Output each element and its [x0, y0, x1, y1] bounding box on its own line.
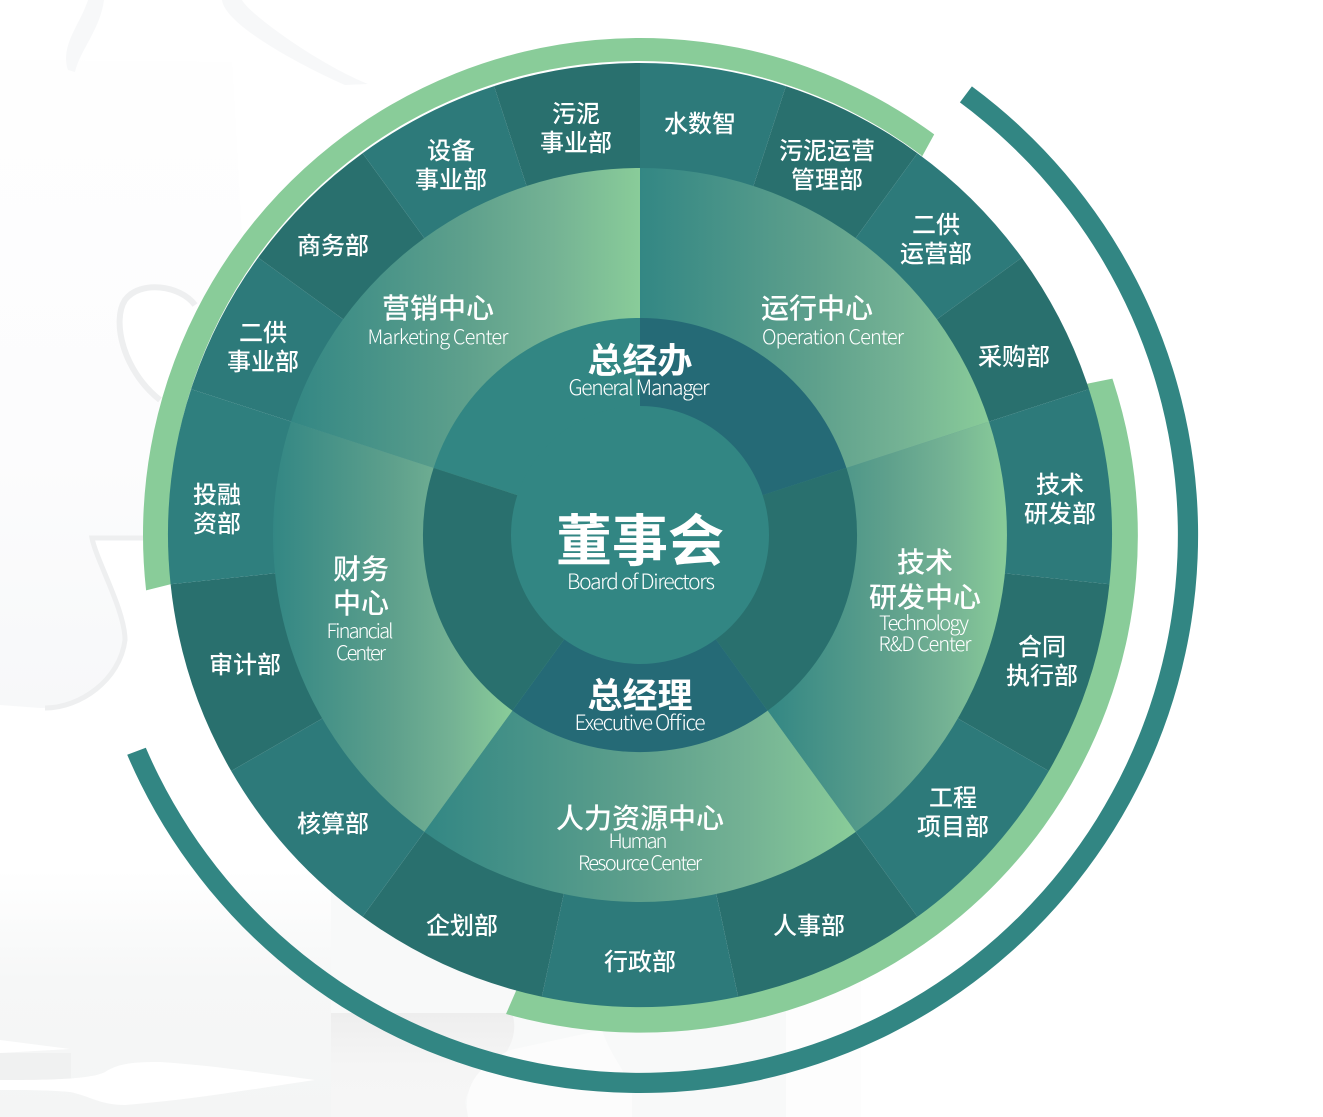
- label: 人力资源中心: Resource Center: [578, 847, 703, 876]
- label: 运行中心: [761, 287, 905, 350]
- label: 董事会: 董事会: [556, 497, 724, 578]
- label: 技术研发部: [1024, 465, 1096, 529]
- center circle: [511, 406, 769, 664]
- label: 污泥事业部: [540, 94, 612, 158]
- label: 人力资源中心: Human: [608, 825, 668, 854]
- label: 技术研发中心: Technology: [879, 607, 969, 636]
- label: 人事部: 人事部: [773, 906, 845, 941]
- sector: human resource center: [424, 535, 856, 902]
- segment: 技术研发部: [640, 389, 1112, 584]
- label: 污泥事业部: 污泥: [552, 94, 600, 129]
- label: 运行中心: Operation Center: [762, 321, 905, 350]
- outer ring: departments: [168, 63, 1112, 1007]
- segment: 人事部: [640, 535, 917, 997]
- segment: 水数智: [640, 63, 786, 535]
- label: 二供事业部: [227, 313, 299, 377]
- sector: executive office: [512, 535, 768, 752]
- label: 合同执行部: 合同: [1018, 627, 1066, 662]
- label: 总经理: [574, 668, 706, 737]
- label: 二供运营部: [900, 205, 972, 269]
- sector: financial center: [273, 422, 640, 832]
- label: 总经办: 总经办: [587, 333, 693, 384]
- label: 营销中心: Marketing Center: [368, 321, 509, 350]
- segment: 污泥运营管理部: [640, 86, 917, 535]
- label: 工程项目部: [917, 778, 989, 842]
- segment: 采购部: [640, 258, 1089, 535]
- label: 投融资部: [193, 475, 241, 539]
- segment: 企划部: [363, 535, 640, 997]
- label: 合同执行部: [1006, 627, 1078, 691]
- sector: general manager: [640, 318, 846, 535]
- outer teal arc: [127, 86, 1198, 1093]
- label: 财务中心: 中心: [333, 582, 389, 622]
- segment: 投融资部: [168, 389, 640, 584]
- label: 行政部: 行政部: [604, 942, 676, 977]
- label: 财务中心: Center: [336, 637, 387, 666]
- label: 设备事业部: 设备: [427, 131, 475, 166]
- label: 技术研发中心: 技术: [897, 541, 953, 581]
- green arc: upper left: [143, 38, 934, 590]
- label: 商务部: 商务部: [297, 226, 369, 261]
- label: 二供事业部: 事业部: [227, 342, 299, 377]
- label: 总经办: General Manager: [568, 372, 710, 402]
- label: 总经理: 总经理: [587, 668, 693, 719]
- label: 二供事业部: 二供: [239, 313, 287, 348]
- sector: operation center: [640, 168, 989, 535]
- segment: 商务部: [258, 153, 640, 535]
- segment: 二供运营部: [640, 153, 1022, 535]
- segment: 污泥事业部: [494, 63, 640, 535]
- label: 设备事业部: [415, 131, 487, 195]
- label: 设备事业部: 事业部: [415, 160, 487, 195]
- label: 财务中心: Financial: [326, 615, 394, 644]
- inner ring: offices: [423, 318, 857, 752]
- label: 工程项目部: 工程: [929, 778, 977, 813]
- label: 污泥运营管理部: 管理部: [791, 160, 863, 195]
- label: 二供运营部: 二供: [912, 205, 960, 240]
- label: 污泥运营管理部: [779, 131, 875, 195]
- label: 二供运营部: 运营部: [900, 234, 972, 269]
- label: 运行中心: 运行中心: [761, 287, 873, 327]
- segment: 核算部: [231, 535, 640, 917]
- label: 财务中心: [326, 548, 394, 666]
- label: 技术研发中心: 研发中心: [869, 576, 981, 616]
- label: 核算部: 核算部: [297, 804, 369, 839]
- middle ring: centers: [273, 168, 1007, 902]
- label: 人力资源中心: [556, 797, 724, 876]
- label: 技术研发部: 技术: [1036, 465, 1084, 500]
- label: 污泥运营管理部: 污泥运营: [779, 131, 875, 166]
- sector: upper left: [434, 318, 640, 535]
- sector: marketing center: [291, 168, 640, 535]
- label: 企划部: 企划部: [426, 906, 498, 941]
- segment: 二供事业部: [191, 258, 640, 535]
- segment: 行政部: [542, 535, 738, 1007]
- label: 投融资部: 资部: [193, 504, 241, 539]
- label: 财务中心: 财务: [333, 548, 389, 588]
- label: 总经理: Executive Office: [574, 707, 706, 737]
- label: 采购部: 采购部: [978, 337, 1050, 372]
- segment: 工程项目部: [640, 535, 1049, 917]
- label: 技术研发中心: [869, 541, 981, 657]
- sector: left: [423, 468, 640, 711]
- label: 合同执行部: 执行部: [1006, 656, 1078, 691]
- label: 营销中心: 营销中心: [382, 287, 494, 327]
- label: 总经办: [568, 333, 710, 402]
- label: 工程项目部: 项目部: [917, 807, 989, 842]
- background puzzle pieces: [0, 0, 861, 1117]
- label: 投融资部: 投融: [193, 475, 241, 510]
- label: 技术研发部: 研发部: [1024, 494, 1096, 529]
- sector: right: [640, 468, 857, 711]
- label: 污泥事业部: 事业部: [540, 123, 612, 158]
- label: 审计部: 审计部: [209, 645, 281, 680]
- segment: 设备事业部: [363, 86, 640, 535]
- sector: technology R&D center: [640, 422, 1007, 832]
- segment: 合同执行部: [640, 535, 1109, 771]
- label: 人力资源中心: 人力资源中心: [556, 797, 724, 837]
- label: 董事会: Board of Directors: [567, 566, 715, 596]
- segment: 审计部: [171, 535, 640, 771]
- label: 营销中心: [368, 287, 509, 350]
- label: 水数智: 水数智: [664, 104, 736, 139]
- label: 技术研发中心: R&D Center: [878, 628, 972, 657]
- green arc: lower right: [506, 379, 1138, 1033]
